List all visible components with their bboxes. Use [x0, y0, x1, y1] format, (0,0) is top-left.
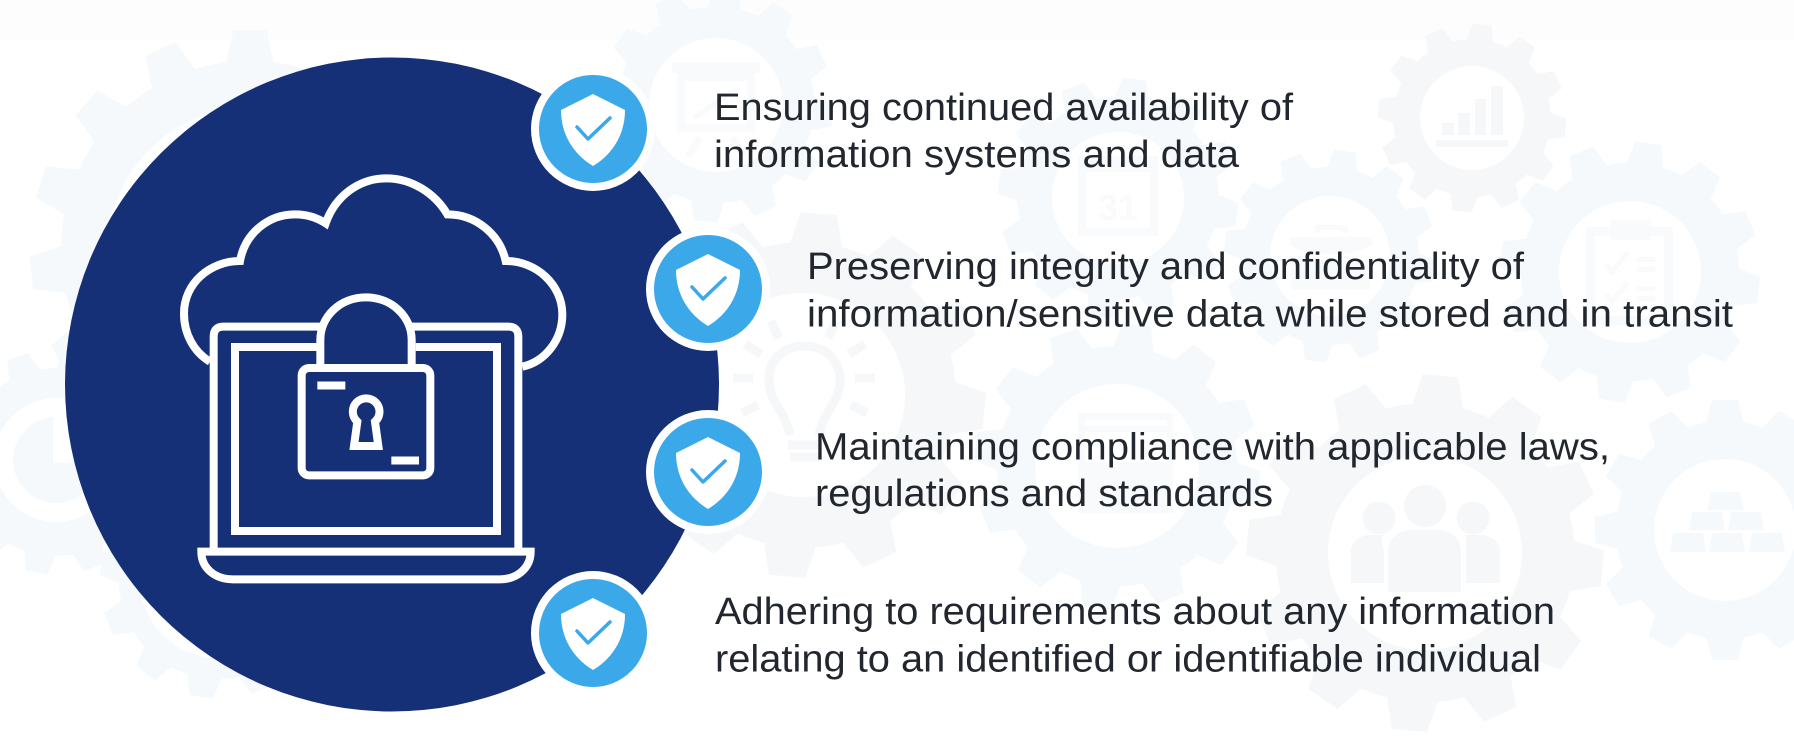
gear: calculator — [955, 304, 1279, 628]
gear: large left — [29, 30, 439, 439]
text: personal information — [715, 591, 1555, 680]
text: personal information: relating to an identified or identifiable individual — [715, 638, 1541, 680]
icon: gold bars — [1670, 492, 1785, 552]
text: availability: Ensuring continued availability of — [714, 87, 1293, 129]
gear: lightbulb — [606, 198, 1000, 592]
laptop screen — [235, 347, 497, 531]
icon: bar chart — [1436, 86, 1508, 147]
cloud outline — [184, 178, 562, 367]
gear: pie chart — [0, 332, 186, 592]
text: integrity and confidentiality: Preserving integrity and confidentiality of — [807, 246, 1524, 288]
label: calendar date: 31 — [1098, 187, 1138, 228]
laptop lid — [214, 327, 518, 552]
text: compliance: Maintaining compliance with applicable laws, — [815, 426, 1610, 468]
text: integrity and confidentiality — [807, 246, 1733, 336]
badge 3: shield check — [646, 410, 770, 534]
text: compliance: regulations and standards — [815, 473, 1273, 515]
icon: clipboard — [1586, 220, 1673, 325]
icon: lightbulb — [733, 321, 875, 457]
icon: laptop with cloud and padlock — [184, 178, 562, 579]
gear: clipboard — [1483, 125, 1777, 419]
text: integrity and confidentiality: information/sensitive data while stored and in transit — [807, 294, 1733, 336]
badge 1: shield check — [531, 67, 655, 191]
icon: people — [1351, 485, 1500, 592]
gear: bottom left — [85, 447, 351, 713]
text: compliance — [815, 426, 1610, 515]
gear: people — [1232, 360, 1618, 740]
padlock detail bars — [317, 385, 419, 460]
laptop base — [201, 552, 531, 579]
gear: bar chart — [1369, 15, 1575, 221]
text: availability: information systems and data — [714, 134, 1240, 176]
gear: monitor chart — [589, 0, 843, 232]
badge 4: shield check — [531, 571, 655, 695]
padlock shackle — [320, 297, 412, 367]
text: availability — [714, 87, 1293, 176]
padlock body — [302, 368, 430, 475]
gear: calendar — [982, 62, 1254, 334]
gear: briefcase — [1210, 136, 1450, 376]
text: personal information: Adhering to requirements about any information — [715, 591, 1555, 633]
badge 2: shield check — [646, 227, 770, 351]
gear: gold bars — [1595, 400, 1794, 660]
main navy circle — [65, 58, 719, 712]
padlock keyhole — [353, 398, 379, 446]
